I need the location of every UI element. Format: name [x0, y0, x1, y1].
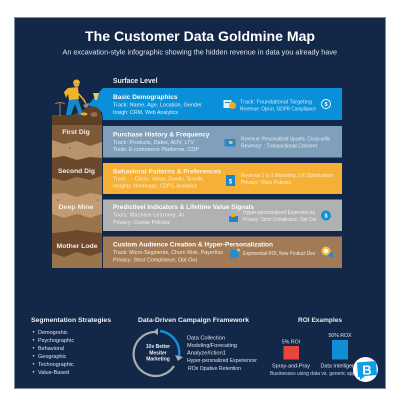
details: Track: Micro-Segments, Churn Risk, Payertius	[113, 250, 223, 256]
heading: ROI Examples	[298, 317, 342, 324]
band: custom audience: Privacy: Strict Compliance, Opt-Out	[113, 258, 198, 264]
title: The Customer Data Goldmine Map	[85, 29, 315, 45]
step list	[187, 336, 257, 372]
band: purchase history: Tools: E-commerce Platforms, CDP	[113, 147, 200, 153]
band: basic demographics: Insigh: CRM, Web Analytics	[113, 110, 178, 116]
outcome: Exponential ROI, New Product Dev	[243, 251, 315, 257]
icon: gold coin	[322, 246, 334, 258]
band: basic demographics	[88, 88, 342, 120]
details: Track: Products, Dates, AOV, LTV	[113, 140, 195, 146]
list: Value-Based	[38, 370, 69, 376]
details: Tools: Machine Learning, AI	[113, 212, 184, 218]
list: Geographic	[38, 354, 67, 360]
outcome: Revenue: Personalized Upsells, Cross-sells	[241, 136, 330, 142]
bar: spray and pray	[272, 340, 310, 370]
outcome: Hyper-personalized Experiences	[243, 210, 315, 216]
step list: ROx Opative Retention	[188, 366, 241, 372]
band: basic demographics: Revenue: Opt-in, GDPR Compliance	[240, 106, 316, 112]
outcome: Revenue 1 to 1 Marketing, UX Optimization	[241, 173, 333, 179]
rock mound	[72, 106, 102, 119]
icon: report with coin	[224, 100, 236, 109]
bar: data intelligence: Data Intelligence	[320, 364, 361, 370]
label: second dig: Second Dig	[58, 168, 95, 175]
heading: Purchase History & Frequency	[113, 132, 210, 138]
list: Technographic	[38, 362, 74, 368]
details: Track: Name, Age, Location, Gender	[113, 102, 202, 108]
band: predictive indicators: Privacy: Cookie Policies	[113, 220, 170, 226]
icon: card	[224, 139, 236, 146]
list: Psychographic	[38, 338, 74, 344]
earth cross-section	[52, 106, 102, 268]
heading: Custom Audience Creation & Hyper-Personalization	[113, 242, 273, 248]
bar: data intelligence	[320, 333, 361, 370]
caption: Businesses using data vs. generic approach	[270, 371, 368, 377]
panel: ROI examples	[270, 317, 368, 377]
band: purchase history	[103, 126, 342, 158]
logo badge	[353, 357, 378, 382]
band: behavioral patterns: Insights: Heatmaps, CDPS, Analytics	[113, 184, 197, 190]
heading: Segmentation Strategies	[31, 317, 111, 324]
label: first dig: First Dig	[62, 129, 90, 136]
heading: surface level: Surface Level	[113, 78, 158, 85]
icon: blocks	[229, 213, 238, 222]
list	[33, 330, 74, 376]
cycle centre text	[146, 344, 170, 362]
step list: Modeling/Forecating	[187, 343, 237, 349]
cycle centre text: Marketing	[146, 356, 170, 362]
icon: bag: $	[229, 180, 233, 186]
band: purchase history: Revency: : Transactional Consent	[241, 144, 318, 150]
subtitle: An excavation-style infographic showing the hidden revenue in data you already have	[62, 48, 337, 56]
bar: spray and pray: Spray-and-Pray	[272, 364, 310, 370]
icon: dollar badge: $	[324, 214, 328, 220]
cycle centre text: Mesiter	[149, 350, 167, 356]
heading: Predictivel Indicators & Lifetime Value Signals	[113, 204, 254, 211]
outcome: Track: Foundational Targeting	[240, 100, 312, 106]
icon: chat box	[230, 248, 240, 258]
step list: Data Collection	[187, 336, 225, 342]
icon: dollar badge	[321, 210, 331, 220]
step list: Analyze/Iction1	[187, 350, 226, 356]
list: Behavioral	[38, 346, 64, 352]
panel: segmentation strategies	[31, 317, 111, 376]
bar: spray and pray: 5% ROI	[282, 340, 300, 346]
icon: miner	[55, 80, 99, 117]
cycle diagram	[134, 328, 183, 376]
logo badge: B	[362, 362, 372, 378]
cycle centre text: 10x Better	[146, 344, 170, 350]
bar: data intelligence: 50% ROX	[328, 333, 352, 339]
list: Demograhic	[38, 330, 68, 336]
label: deep mine: Deep Mine	[58, 204, 94, 211]
heading: Basic Demographics	[113, 94, 178, 101]
heading: Behavioral Patterns & Preferences	[113, 168, 221, 176]
band: predictive indicators: Privacy: Strict Compliance, Opt-Out	[243, 217, 317, 223]
band: custom audience	[103, 236, 342, 268]
band: behavioral patterns	[103, 163, 342, 194]
band: behavioral patterns: Privacy: Titles Policies	[241, 180, 291, 186]
icon: bag	[226, 175, 235, 186]
heading: Data-Driven Campaign Framework	[138, 317, 249, 324]
icon: dollar circle: $	[324, 102, 328, 108]
step list: Hyper-persnalized Experiencer	[187, 358, 257, 364]
panel: campaign framework	[134, 317, 257, 376]
band: predictive indicators	[103, 200, 342, 231]
icon: dollar circle	[322, 100, 330, 108]
label: mother lode: Mother Lode	[56, 243, 98, 250]
details: Track: . : Clicks, Views, Dwells, Scrolls,	[113, 176, 204, 182]
